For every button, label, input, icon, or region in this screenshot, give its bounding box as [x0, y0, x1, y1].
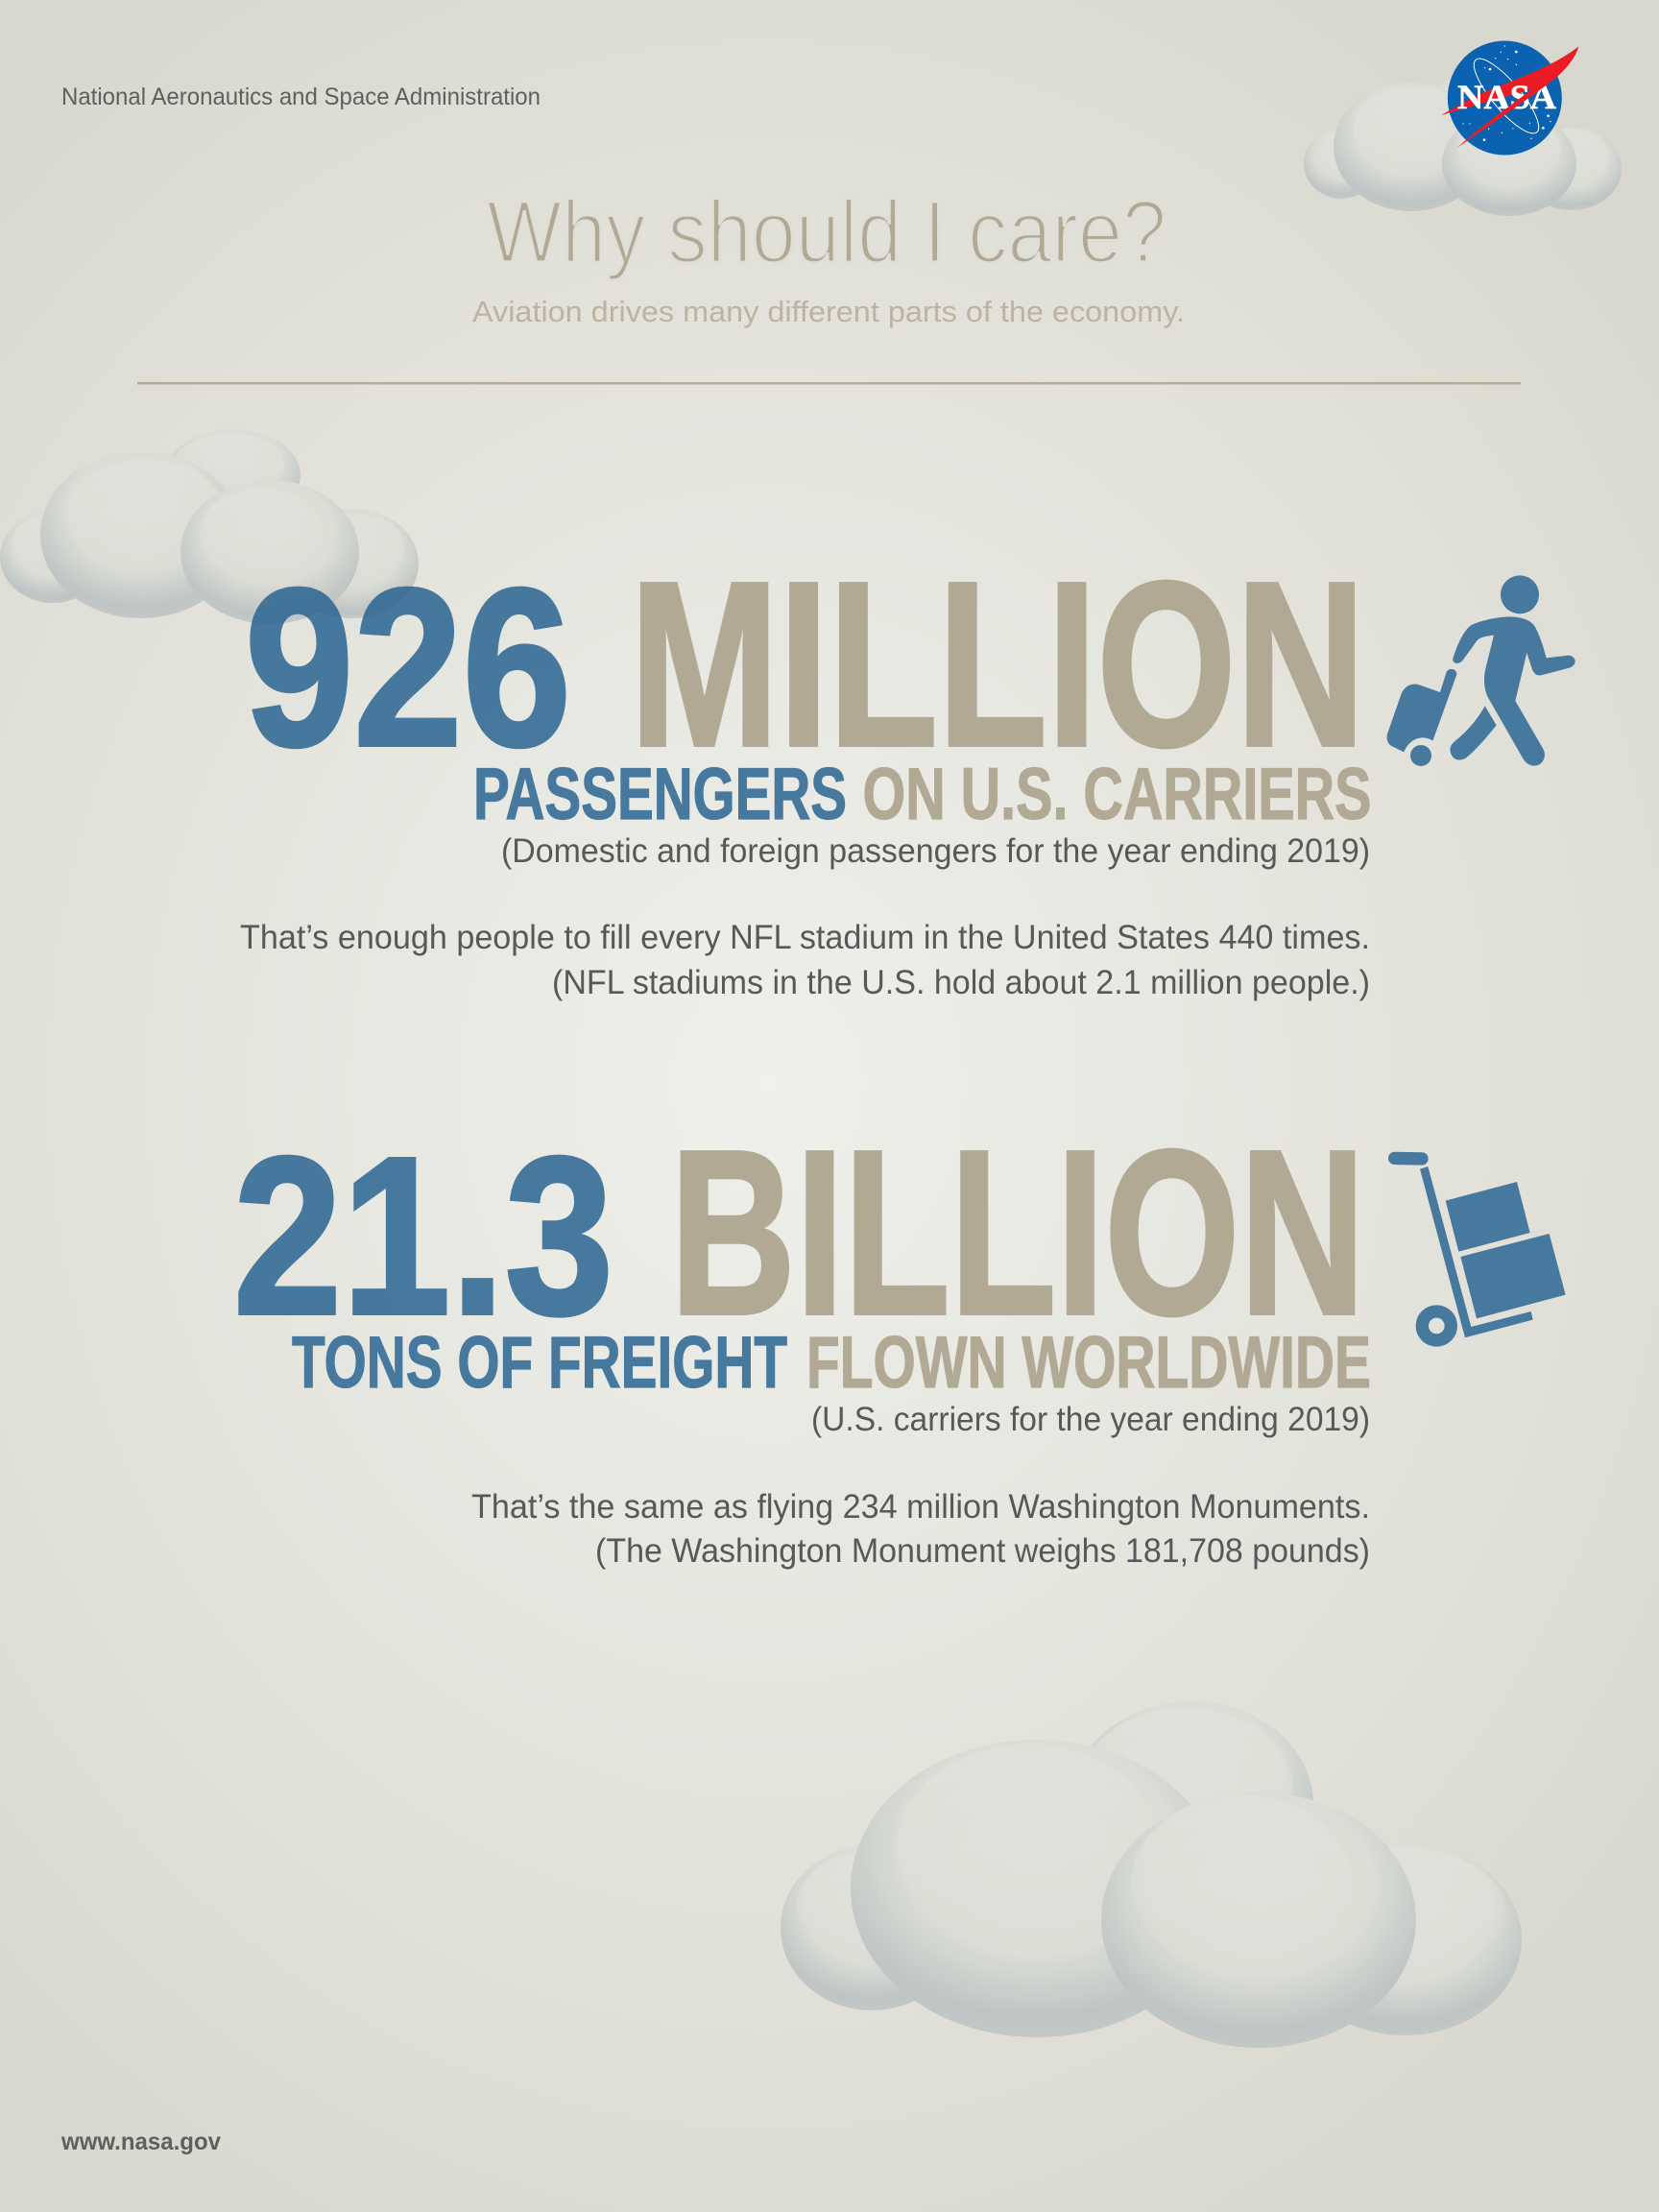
comparison text — [471, 1488, 1370, 1570]
comparison text: (NFL stadiums in the U.S. hold about 2.1 million people.) — [552, 964, 1370, 1001]
cloud: top right — [1304, 75, 1622, 216]
title: Why should I care? — [487, 183, 1166, 281]
icon: hand truck with boxes — [1388, 1152, 1566, 1340]
label: passengers: PASSENGERS — [473, 754, 847, 835]
note: (U.S. carriers for the year ending 2019) — [811, 1401, 1370, 1438]
comparison text: (The Washington Monument weighs 181,708 pounds) — [595, 1532, 1370, 1570]
label: on U.S. carriers: ON U.S. CARRIERS — [862, 754, 1371, 835]
stat: 926 million passengers — [240, 533, 1371, 1001]
comparison text: That’s enough people to fill every NFL stadium in the United States 440 times. — [240, 919, 1370, 956]
cloud: bottom — [781, 1701, 1522, 2048]
agency name: National Aeronautics and Space Administration — [61, 84, 541, 110]
subtitle: Aviation drives many different parts of the economy. — [472, 295, 1185, 328]
website: www.nasa.gov — [60, 2128, 221, 2155]
number: 926: 926 — [245, 541, 571, 793]
cloud: upper left — [0, 429, 419, 624]
unit: million: MILLION — [630, 533, 1365, 795]
label: flown worldwide: FLOWN WORLDWIDE — [806, 1322, 1371, 1404]
divider — [137, 382, 1521, 384]
number: 21.3: 21.3 — [233, 1110, 613, 1361]
icon: traveler with suitcase — [1387, 575, 1575, 766]
unit: billion: BILLION — [670, 1101, 1365, 1363]
stat: 21.3 billion tons — [233, 1101, 1371, 1570]
label: tons of freight: TONS OF FREIGHT — [292, 1322, 787, 1404]
comparison text: That’s the same as flying 234 million Washington Monuments. — [471, 1488, 1370, 1526]
icon: NASA logo: NASA — [1457, 78, 1556, 116]
comparison text — [240, 919, 1370, 1001]
icon: NASA logo — [1441, 40, 1578, 156]
note: (Domestic and foreign passengers for the year ending 2019) — [501, 832, 1370, 870]
